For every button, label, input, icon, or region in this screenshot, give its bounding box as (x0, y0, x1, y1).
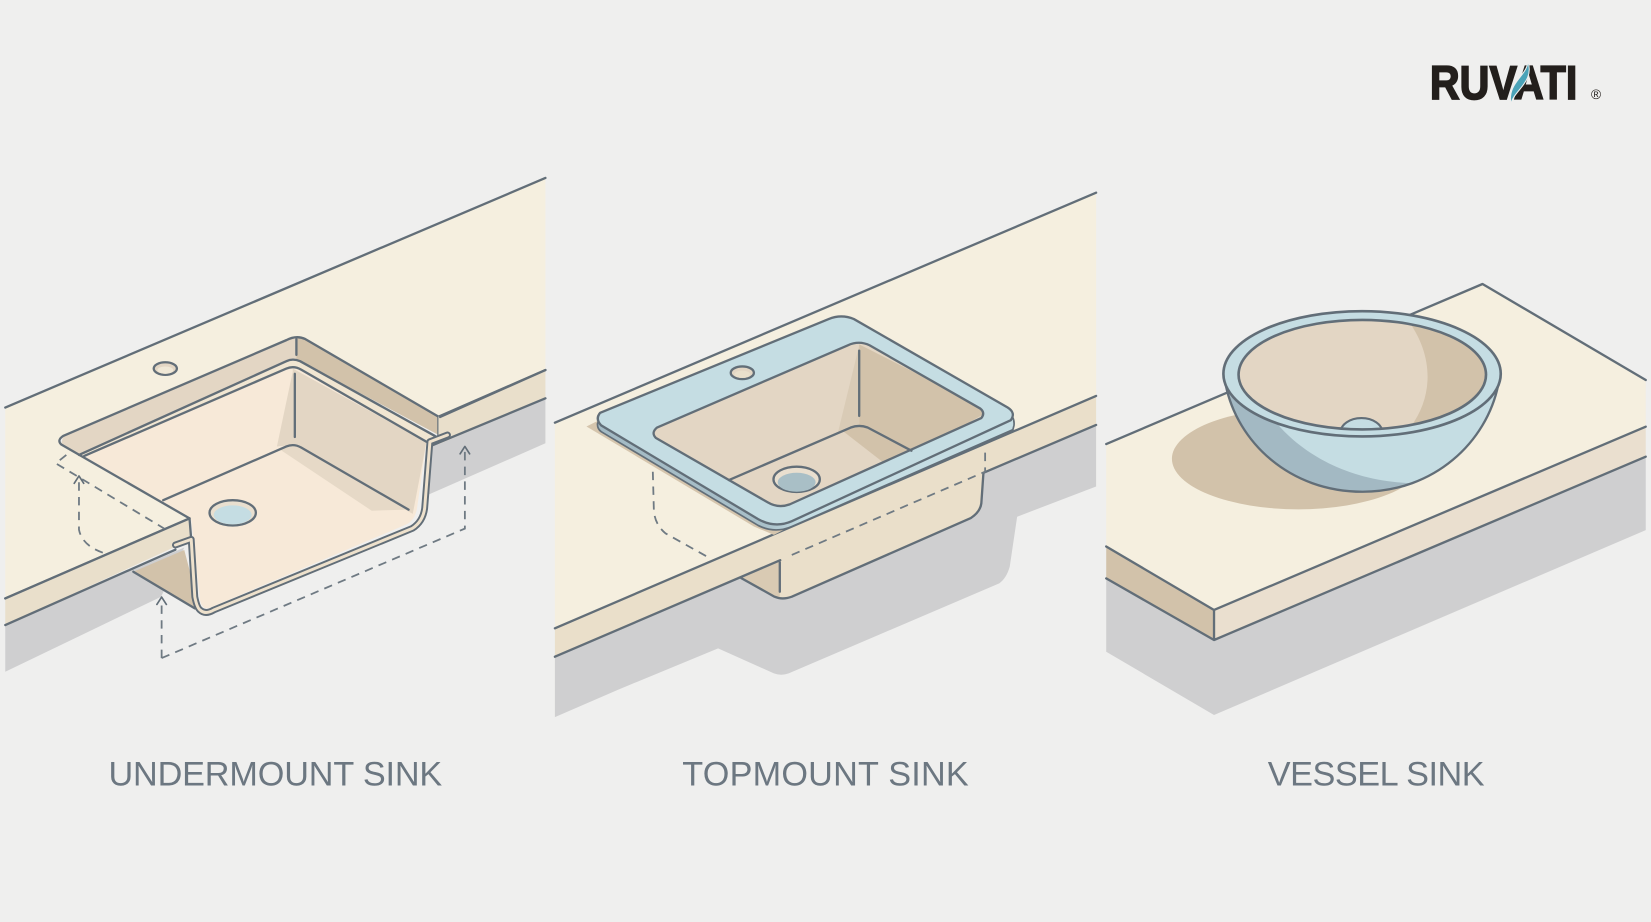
basin drain (773, 467, 820, 492)
bowl interior (1237, 318, 1488, 431)
sink interior (82, 367, 426, 608)
sink drain (210, 500, 256, 525)
sink body below counter (737, 443, 983, 598)
sink wall profile (175, 435, 447, 612)
faucet hole (154, 362, 177, 375)
vessel bowl (1221, 311, 1501, 500)
logo: Ruvati: ® (1591, 87, 1601, 102)
countertop with cutout (5, 178, 545, 598)
dashed installation arrows (56, 446, 470, 658)
bowl rim (1223, 311, 1501, 436)
logo: Ruvati: RUVATI (1430, 57, 1577, 110)
heading: vessel sink: VESSEL SINK (1268, 756, 1485, 794)
hidden sink outline (653, 450, 985, 558)
flange shadow (586, 417, 800, 535)
counter shadow on floor (5, 398, 545, 672)
icon: blue swoosh (1510, 61, 1529, 104)
panel: topmount sink (555, 193, 1096, 794)
bowl body (1224, 386, 1499, 493)
panel: undermount sink (5, 178, 545, 794)
counter shadow on floor (555, 425, 1096, 717)
countertop (555, 193, 1096, 657)
bowl shadow (1172, 408, 1425, 509)
sink outer side wall (133, 550, 200, 610)
heading: topmount sink: TOPMOUNT SINK (682, 756, 969, 794)
faucet hole (731, 366, 754, 379)
sink flange (597, 316, 1014, 530)
heading: undermount sink: UNDERMOUNT SINK (108, 756, 442, 794)
sink basin opening (654, 343, 990, 506)
countertop front faces (5, 370, 545, 625)
countertop slab (1106, 284, 1646, 640)
counter shadow on floor (1106, 457, 1646, 715)
panel: vessel sink (1106, 284, 1646, 794)
